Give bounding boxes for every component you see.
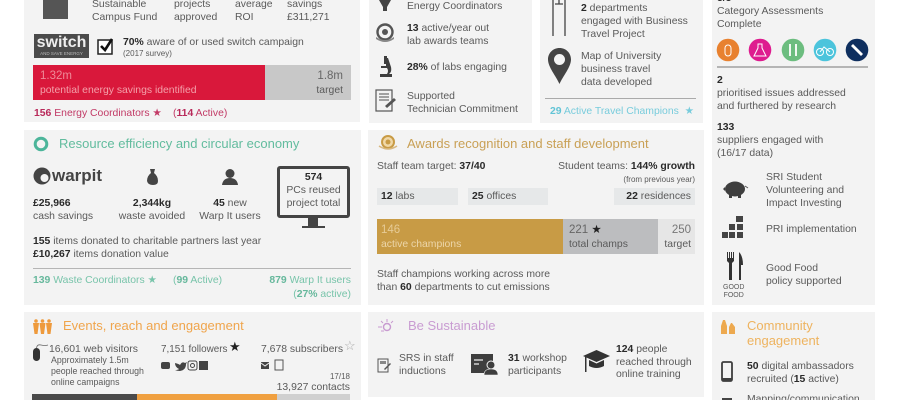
map text: business travel bbox=[581, 64, 650, 75]
icon: award badge bbox=[376, 23, 394, 42]
subscribers: 7,678 subscribers bbox=[261, 344, 343, 355]
energy coordinators: 156 Energy Coordinators ★ bbox=[34, 108, 162, 119]
warp it users: (27% active) bbox=[293, 289, 351, 300]
panel: procurement and investment bbox=[712, 0, 875, 305]
campaign awareness text: 70% aware of or used switch campaign bbox=[123, 37, 304, 48]
technician commitment text: Technician Commitment bbox=[407, 104, 518, 115]
champions bar bbox=[377, 219, 695, 254]
icon: person bbox=[222, 169, 238, 185]
icon: piggy bank bbox=[723, 182, 748, 198]
champions text bbox=[377, 268, 550, 294]
energy savings bar: potential energy savings identified bbox=[40, 85, 197, 96]
suppliers text: suppliers engaged with bbox=[717, 135, 823, 146]
panel: travel bbox=[540, 0, 703, 123]
cash savings stat: cash savings bbox=[33, 211, 93, 222]
SRI text: SRI Student bbox=[766, 172, 822, 183]
online training text: reached through bbox=[616, 357, 692, 368]
SRI text: Impact Investing bbox=[766, 198, 842, 209]
departments text: engaged with Business bbox=[581, 16, 688, 27]
map text: Map of University bbox=[581, 51, 661, 62]
panel: energy bbox=[24, 0, 360, 122]
SRI text bbox=[766, 172, 844, 209]
map text: data developed bbox=[581, 77, 652, 88]
SRS text bbox=[399, 352, 454, 378]
icon: bulb bbox=[379, 0, 391, 11]
good food label: FOOD bbox=[724, 292, 744, 298]
workshop text bbox=[508, 352, 567, 378]
digital ambassadors text: recruited (15 active) bbox=[747, 374, 839, 385]
community heading bbox=[747, 318, 819, 348]
icon: fund box bbox=[43, 0, 68, 19]
icon: map pin bbox=[548, 48, 571, 84]
icon: be sustainable sun bbox=[377, 318, 395, 333]
labs box bbox=[377, 188, 458, 205]
icon: mapping bbox=[722, 398, 732, 400]
good food text bbox=[766, 263, 842, 287]
switch logo: AND SAVE ENERGY bbox=[40, 51, 83, 56]
projects text: approved bbox=[174, 12, 217, 23]
residences box: 22 residences bbox=[626, 191, 691, 202]
champions bar: 250 bbox=[672, 224, 691, 236]
energy savings bar: 1.8m bbox=[317, 70, 343, 82]
prioritised issues text: prioritised issues addressed bbox=[717, 88, 846, 99]
category assessments text bbox=[717, 6, 823, 30]
awards heading: Awards recognition and staff development bbox=[407, 136, 649, 151]
monitor: PCs reused: project total bbox=[287, 198, 340, 209]
icon: workshop bbox=[471, 354, 499, 375]
switch logo bbox=[34, 34, 89, 58]
lab awards text bbox=[407, 23, 489, 47]
energy coordinators label: Energy Coordinators bbox=[407, 1, 502, 12]
student teams: Student teams: 144% growth bbox=[558, 161, 695, 172]
energy active: (114 Active) bbox=[173, 108, 227, 119]
followers: 7,151 followers bbox=[161, 344, 227, 355]
ROI text bbox=[235, 0, 273, 23]
icon: inductions document bbox=[377, 358, 392, 373]
staff team target: Staff team target: 37/40 bbox=[377, 161, 485, 172]
energy savings bar bbox=[33, 65, 351, 100]
campaign reach: online campaigns bbox=[51, 377, 119, 387]
lab awards text: lab awards teams bbox=[407, 36, 488, 47]
panel: awards bbox=[368, 130, 704, 305]
icon: graduation cap bbox=[583, 350, 610, 374]
fund text bbox=[92, 0, 157, 23]
champions bar: 146 bbox=[381, 224, 400, 236]
icon: award rosette bbox=[378, 135, 398, 151]
donations text: £10,267 items donation value bbox=[33, 249, 169, 260]
good food text: Good Food bbox=[766, 263, 818, 274]
PRI text: PRI implementation bbox=[766, 224, 857, 235]
icon: waste bag bbox=[147, 169, 158, 185]
new users stat: Warp It users bbox=[199, 211, 261, 222]
social icons bbox=[160, 360, 208, 371]
category assessments text: Category Assessments bbox=[717, 6, 823, 17]
warp it users: 879 Warp It users bbox=[269, 275, 351, 286]
previous year note: (from previous year) bbox=[623, 175, 695, 184]
technician commitment text bbox=[407, 91, 518, 115]
cash savings stat: £25,966 bbox=[33, 198, 71, 209]
icon: commitment document bbox=[375, 89, 396, 112]
waste avoided stat bbox=[118, 198, 185, 222]
icon: people bbox=[33, 319, 52, 334]
departments text bbox=[581, 3, 688, 40]
workshop text: 31 workshop bbox=[508, 353, 567, 364]
prioritised issues text bbox=[717, 75, 846, 112]
icon: microscope bbox=[380, 56, 392, 77]
waste active: (99 Active) bbox=[173, 275, 222, 286]
travel champions: 29 Active Travel Champions ★ bbox=[550, 106, 694, 117]
SRS text: inductions bbox=[399, 366, 446, 377]
energy savings bar: target bbox=[316, 85, 343, 96]
switch logo: switch bbox=[37, 34, 86, 51]
category icons bbox=[716, 38, 868, 62]
digital ambassadors text: 50 digital ambassadors bbox=[747, 361, 854, 372]
technician commitment text: Supported bbox=[407, 91, 455, 102]
campaign reach: people reached through bbox=[51, 366, 144, 376]
good food label bbox=[723, 284, 744, 298]
survey note: (2017 survey) bbox=[123, 49, 172, 58]
campaign reach bbox=[51, 355, 144, 388]
savings text bbox=[287, 0, 330, 23]
suppliers text: 133 bbox=[717, 122, 734, 133]
new users stat: 45 new bbox=[213, 198, 247, 209]
panel: community bbox=[712, 312, 875, 400]
offices box bbox=[468, 188, 548, 205]
fund text: Campus Fund bbox=[92, 12, 157, 23]
champions bar: target bbox=[664, 239, 691, 250]
icon: fork and knife bbox=[727, 252, 743, 280]
prioritised issues text: and furthered by research bbox=[717, 101, 836, 112]
warpit logo: warpit bbox=[52, 166, 102, 185]
icon: checkbox bbox=[97, 38, 114, 55]
lab awards text: 13 active/year out bbox=[407, 23, 489, 34]
waste avoided stat: waste avoided bbox=[119, 211, 185, 222]
departments text: Travel Project bbox=[581, 29, 645, 40]
map text bbox=[581, 51, 662, 88]
events heading: Events, reach and engagement bbox=[63, 318, 244, 333]
prioritised issues text: 2 bbox=[717, 75, 723, 86]
online training text: online training bbox=[616, 369, 681, 380]
web visitors: 16,601 web visitors bbox=[49, 344, 138, 355]
icon: mouse bbox=[33, 344, 49, 361]
star black: ★ bbox=[229, 339, 241, 354]
panel: events bbox=[24, 312, 361, 400]
workshop text: participants bbox=[508, 366, 561, 377]
panel: lab sustainability bbox=[369, 0, 532, 123]
be sustainable heading: Be Sustainable bbox=[408, 318, 495, 333]
suppliers text bbox=[717, 122, 823, 159]
SRS text: SRS in staff bbox=[399, 353, 454, 364]
champions bar: 221 ★ bbox=[569, 224, 602, 236]
contacts: 13,927 contacts bbox=[277, 382, 350, 393]
SRI text: Volunteering and bbox=[766, 185, 844, 196]
suppliers text: (16/17 data) bbox=[717, 148, 773, 159]
mail icons bbox=[261, 360, 285, 371]
events bar bbox=[32, 394, 350, 400]
departments text: 2 departments bbox=[581, 3, 647, 14]
champions text: than 60 departments to cut emissions bbox=[377, 282, 550, 293]
resource efficiency heading: Resource efficiency and circular economy bbox=[59, 136, 299, 151]
warp it users bbox=[269, 274, 351, 302]
panel: resource efficiency bbox=[24, 130, 361, 305]
offices box: 25 offices bbox=[472, 191, 516, 202]
digital ambassadors text bbox=[747, 360, 854, 386]
icon: travel pipes bbox=[552, 0, 566, 36]
residences box bbox=[614, 188, 695, 205]
icon: community bottles bbox=[721, 320, 735, 334]
community heading: Community bbox=[747, 318, 813, 333]
icon: phone bbox=[721, 361, 733, 382]
monitor: PCs reused: PCs reused bbox=[286, 185, 341, 196]
icon: recycling ring bbox=[34, 136, 48, 152]
online training text: 124 people bbox=[616, 344, 667, 355]
good food label: GOOD bbox=[723, 284, 744, 291]
champions text: Staff champions working across more bbox=[377, 269, 550, 280]
monitor: PCs reused: 574 bbox=[305, 172, 322, 183]
new users stat bbox=[199, 198, 261, 222]
category assessments text: Complete bbox=[717, 19, 761, 30]
energy savings bar: 1.32m bbox=[40, 70, 72, 82]
year label: 17/18 bbox=[330, 372, 350, 381]
online training text bbox=[616, 344, 692, 382]
star grey: ☆ bbox=[344, 338, 356, 353]
donations text: 155 items donated to charitable partners last year bbox=[33, 236, 261, 247]
ROI text: ROI bbox=[235, 12, 253, 23]
panel: be sustainable bbox=[368, 312, 704, 397]
campaign reach: Approximately 1.5m bbox=[51, 355, 129, 365]
waste coordinators: 139 Waste Coordinators ★ bbox=[33, 275, 157, 286]
champions bar: total champs bbox=[569, 239, 628, 250]
icon: PRI blocks bbox=[722, 216, 743, 238]
waste avoided stat: 2,344kg bbox=[133, 198, 171, 209]
champions bar: active champions bbox=[381, 239, 461, 250]
community heading: engagement bbox=[747, 333, 819, 348]
monitor: PCs reused bbox=[277, 166, 350, 228]
donations text bbox=[33, 236, 262, 260]
labs engaging text: 28% of labs engaging bbox=[407, 62, 507, 73]
projects text bbox=[174, 0, 217, 23]
labs box: 12 labs bbox=[381, 191, 415, 202]
good food text: policy supported bbox=[766, 276, 842, 287]
savings text: £311,271 bbox=[287, 12, 330, 23]
cash savings stat bbox=[33, 198, 93, 222]
